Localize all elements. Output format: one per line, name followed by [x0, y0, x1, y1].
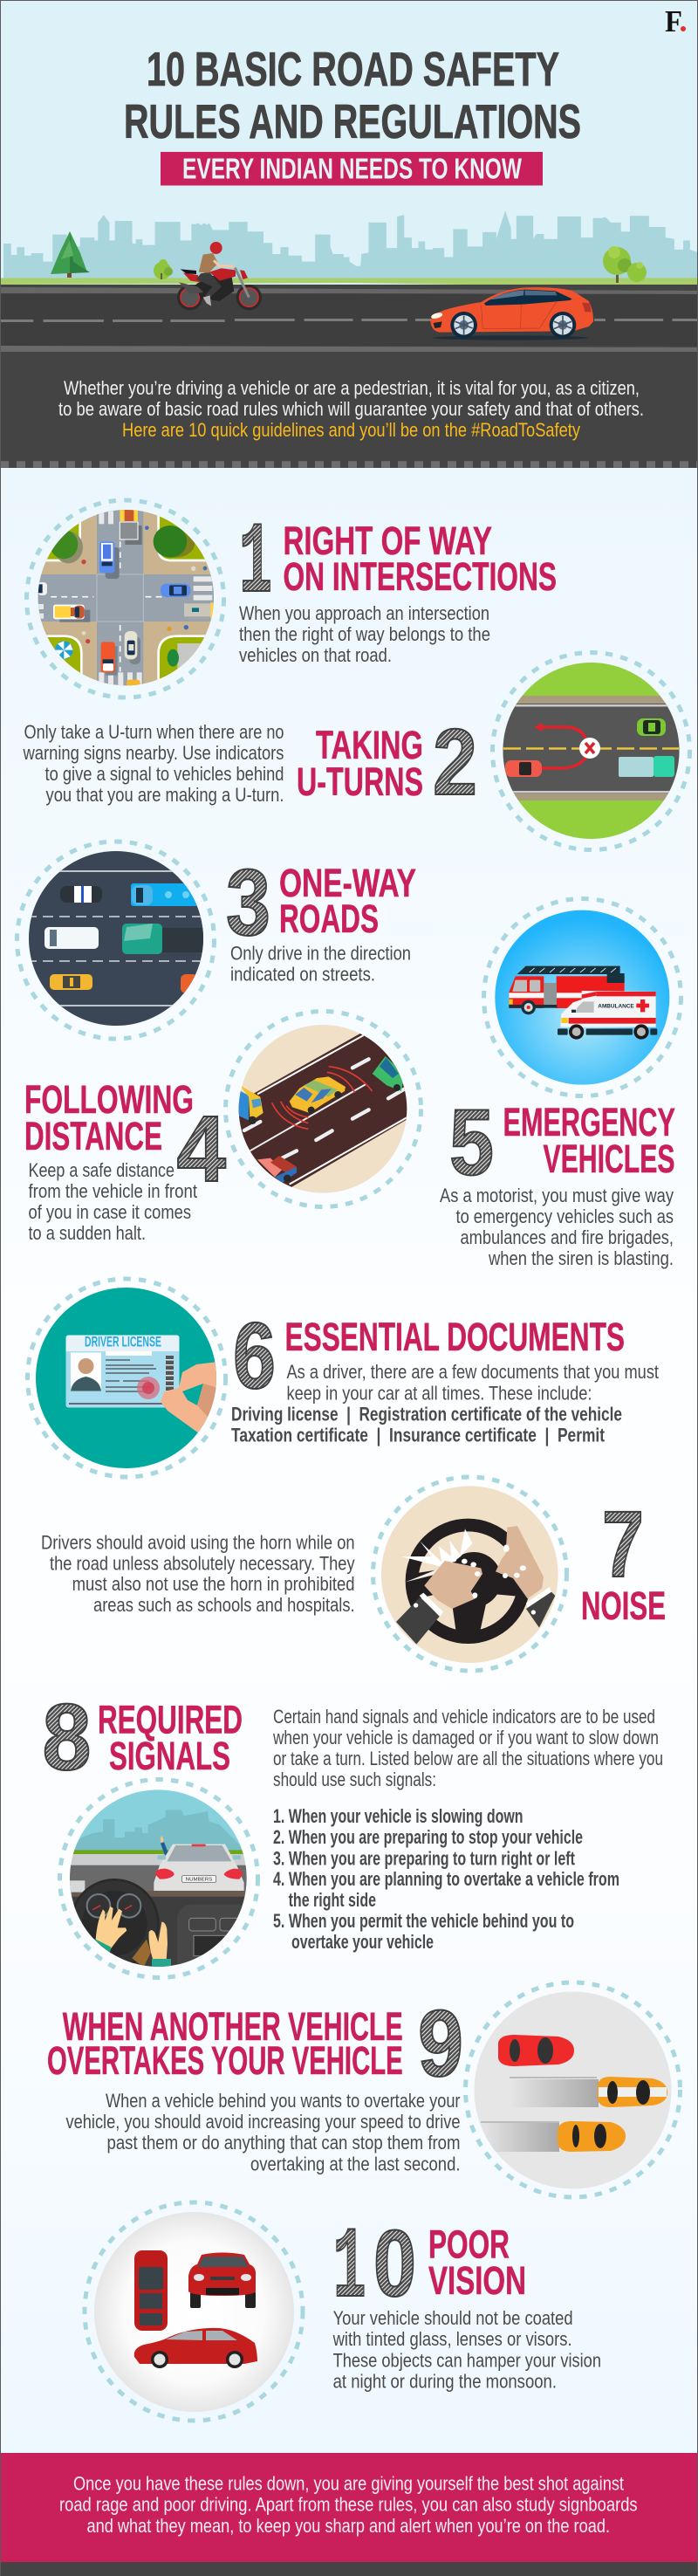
illustration: driver license [36, 1288, 216, 1468]
number 10: 0 [373, 2210, 416, 2316]
text block: you that you are making a U-turn. [45, 784, 284, 806]
license card: DRIVER LICENSE [85, 1334, 161, 1350]
heading: FOLLOWING [24, 1077, 194, 1122]
motorcycle rider [177, 242, 262, 310]
heading: U-TURNS [297, 759, 423, 804]
text block: Your vehicle should not be coated [333, 2307, 573, 2329]
text block: the road unless absolutely necessary. They [50, 1552, 355, 1575]
dashed ring [225, 1011, 421, 1206]
red car [498, 2035, 574, 2066]
text block [28, 1159, 197, 1244]
hand [161, 1362, 220, 1433]
panel: rule 7 [41, 1477, 666, 1671]
illustration: driver signalling [68, 1788, 253, 1975]
text block: warning signs nearby. Use indicators [23, 742, 284, 764]
ambulance [560, 991, 656, 1027]
illustration: U-turn [497, 659, 685, 842]
text block: When you approach an intersection [239, 602, 489, 624]
right hand [496, 1526, 544, 1598]
illustration: intersection [35, 505, 218, 691]
heading: ROADS [279, 896, 379, 941]
intro text [58, 377, 644, 441]
page background [0, 468, 698, 2453]
number 9: 9 [418, 1990, 463, 2096]
heading: POOR [428, 2222, 510, 2267]
green van [373, 1056, 404, 1091]
text block: vehicle, you should avoid increasing your speed to drive [66, 2111, 461, 2133]
umbrella [55, 641, 73, 659]
list of situations [273, 1805, 619, 1953]
number 3: 3 [226, 849, 270, 955]
license card [66, 1334, 180, 1407]
header panel [0, 0, 698, 468]
illustration: fire engine and ambulance: AMBULANCE [598, 1003, 634, 1009]
panel: rule 10 [85, 2202, 601, 2421]
text block: to a sudden halt. [28, 1222, 146, 1244]
dashed ring [17, 841, 215, 1039]
text block [239, 602, 490, 666]
heading: ON INTERSECTIONS [283, 554, 557, 599]
text block: areas such as schools and hospitals. [93, 1594, 355, 1616]
footer text [59, 2472, 638, 2537]
text block: of you in case it comes [28, 1201, 191, 1223]
heading: RIGHT OF WAY [283, 519, 492, 563]
heading [98, 1698, 243, 1778]
number 4: 4 [176, 1096, 226, 1201]
front view car [188, 2252, 256, 2308]
text block [332, 2307, 601, 2393]
illustration: red cars [94, 2212, 294, 2412]
spark [401, 1528, 472, 1567]
text block [230, 943, 411, 985]
text block: Keep a safe distance [28, 1159, 174, 1181]
panel: rule 6 [28, 1279, 659, 1477]
city skyline [0, 210, 698, 278]
panel: rule 1 [26, 500, 557, 697]
panel: rule 5 [440, 899, 681, 1269]
text block: Drivers should avoid using the horn while on [41, 1531, 355, 1553]
panel: rule 3 [17, 841, 416, 1039]
number 2: 2 [433, 709, 477, 814]
panel: rule 2 [23, 653, 689, 850]
number 10: 1 [333, 2211, 366, 2326]
text block: These objects can hamper your vision [333, 2349, 601, 2371]
dashed ring [85, 2202, 303, 2421]
dashboard [68, 1891, 249, 1897]
list of situations: 1. When your vehicle is slowing down [273, 1805, 524, 1827]
heading: OVERTAKES YOUR VEHICLE [47, 2038, 403, 2083]
list of situations: 2. When you are preparing to stop your vehicle [273, 1826, 583, 1848]
heading: DISTANCE [24, 1114, 162, 1158]
text block [41, 1531, 355, 1616]
text block: When a vehicle behind you wants to overtake your [106, 2090, 461, 2112]
text block: to give a signal to vehicles behind [45, 763, 284, 785]
pine tree [51, 231, 90, 278]
dashed ring [59, 1779, 258, 1978]
sensor arcs [272, 1067, 373, 1129]
panel: rule 4 [24, 999, 421, 1244]
grass strip [0, 278, 698, 288]
side view car [134, 2328, 257, 2368]
heading: REQUIRED [98, 1698, 243, 1742]
red car [430, 287, 593, 340]
list of situations: 3. When you are preparing to turn right or left [273, 1847, 575, 1870]
heading: VISION [428, 2258, 526, 2303]
text block: indicated on streets. [230, 964, 375, 985]
orange car [558, 2121, 626, 2152]
hands [96, 1906, 127, 1949]
text block [231, 1361, 659, 1446]
illustration: fire engine and ambulance [495, 910, 669, 1085]
illustration: overtaking cars [471, 1989, 676, 2194]
subtitle banner: EVERY INDIAN NEEDS TO KNOW [182, 152, 523, 185]
list of situations: 5. When you permit the vehicle behind you to [273, 1910, 574, 1932]
fire engine [517, 966, 620, 974]
title [124, 42, 581, 148]
text block: with tinted glass, lenses or visors. [332, 2328, 572, 2350]
text block: must also not use the horn in prohibited [72, 1573, 355, 1595]
heading [24, 1077, 194, 1158]
number 1: 1 [239, 506, 272, 622]
road and intro panel [0, 285, 698, 468]
number 7: 7 [602, 1491, 644, 1597]
illustration: one-way road [26, 847, 209, 1030]
panel: rule 9 [47, 1982, 681, 2197]
yellow car [290, 1076, 346, 1113]
heading [279, 861, 416, 941]
white car ahead [154, 1844, 244, 1891]
number 8: 8 [42, 1684, 91, 1789]
text block: at night or during the monsoon. [333, 2371, 557, 2393]
heading [283, 519, 557, 599]
text block: overtaking at the last second. [250, 2153, 461, 2175]
list of situations: the right side [289, 1889, 376, 1911]
striped orange car [598, 2077, 667, 2107]
text block: Only take a U-turn when there are no [24, 721, 284, 743]
truck left [239, 1091, 249, 1121]
illustration: horn [380, 1484, 563, 1667]
dashed ring [492, 653, 689, 850]
number 5: 5 [449, 1089, 494, 1194]
dashed ring [26, 500, 223, 697]
text block: from the vehicle in front [28, 1180, 197, 1202]
logo: F [665, 4, 682, 38]
top view car [134, 2250, 168, 2331]
text block [440, 1185, 674, 1269]
text block: then the right of way belongs to the [239, 623, 490, 645]
pickup [257, 1158, 282, 1177]
text block: should use such signals: [273, 1769, 436, 1790]
number 6: 6 [233, 1302, 276, 1408]
bush left [154, 259, 173, 279]
left hand [424, 1561, 482, 1609]
heading [428, 2222, 526, 2303]
footer panel [0, 2453, 698, 2576]
text block [23, 721, 284, 806]
illustration: driver signalling: NUMBERS [186, 1878, 213, 1883]
text block: Taxation certificate | Insurance certificate | Permit [231, 1425, 606, 1446]
heading [503, 1100, 675, 1181]
dashed ring [28, 1279, 225, 1477]
heading [47, 2004, 403, 2083]
sky [0, 0, 698, 288]
heading: TAKING [316, 723, 423, 767]
text block: keep in your car at all times. These include: [286, 1383, 592, 1404]
text block [66, 2090, 461, 2175]
heading: ONE-WAY [279, 861, 416, 905]
text block: Only drive in the direction [230, 943, 411, 964]
text block: vehicles on that road. [239, 644, 392, 666]
vehicles [38, 510, 214, 689]
text block [272, 1706, 663, 1790]
heading [297, 723, 423, 804]
panel: rule 8 [42, 1684, 663, 1978]
text block: past them or do anything that can stop them from [106, 2132, 461, 2154]
dashed ring [483, 899, 681, 1096]
heading: WHEN ANOTHER VEHICLE [63, 2004, 403, 2049]
illustration: following distance [239, 1025, 407, 1193]
intro text: Here are 10 quick guidelines and you’ll be on the #RoadToSafety [122, 419, 580, 441]
dashed ring [373, 1477, 567, 1671]
trees right [603, 246, 647, 283]
list of situations: overtake your vehicle [291, 1931, 434, 1953]
dashed ring [466, 1982, 681, 2197]
heading: SIGNALS [109, 1734, 230, 1778]
